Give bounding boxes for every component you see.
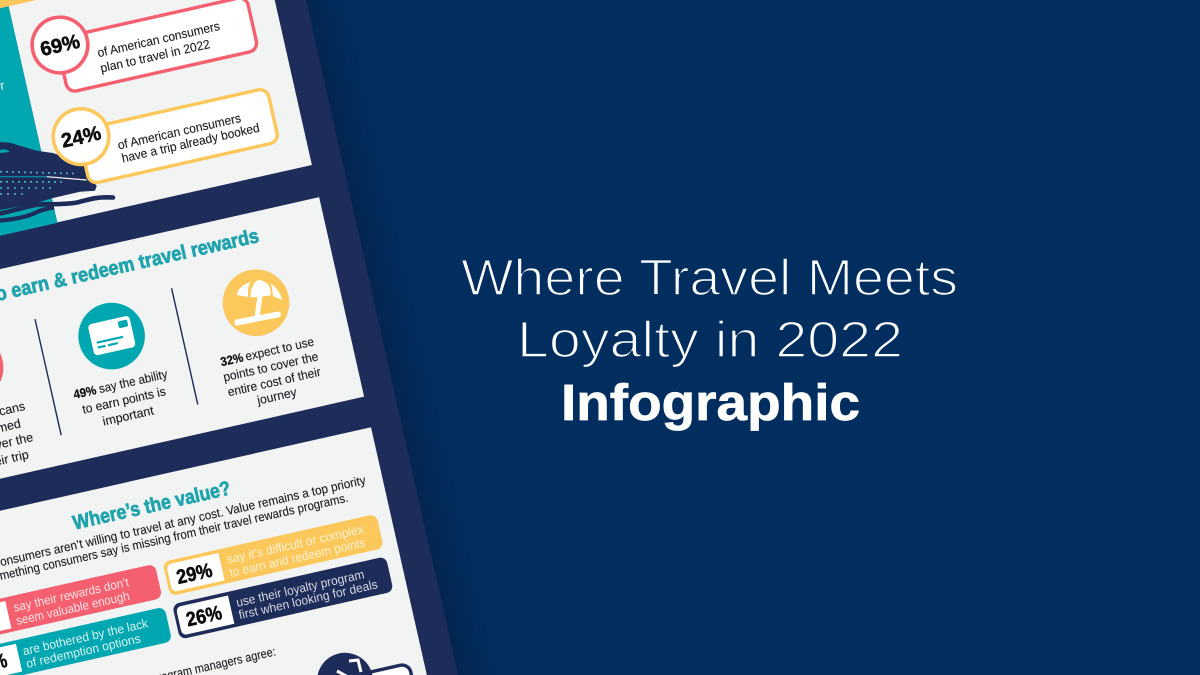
- stat pill: 26 percent: use their loyalty program: [235, 567, 366, 610]
- stat: 49 percent: 49%: [72, 383, 98, 402]
- heading: where's the value: Where’s the value?: [71, 478, 233, 534]
- stat: 49 percent: to earn points is: [81, 384, 167, 417]
- stat: 32 percent: entire cost of their: [226, 365, 322, 399]
- icon: beach umbrella: [234, 280, 282, 326]
- stat: 32 percent: 32%: [219, 350, 245, 369]
- tilted infographic sheet: [0, 0, 528, 675]
- body copy: Consumers aren’t willing to travel at any cost. Value remains a top priority: [0, 473, 368, 571]
- title line 3: Infographic: [561, 374, 860, 431]
- stat pill: 26 percent: [172, 556, 394, 640]
- callout: 24 percent: [48, 67, 279, 190]
- stat pill: 29 percent: [163, 514, 384, 596]
- stat pill: lack of redemption options: [0, 607, 172, 675]
- stat pill: 29 percent: to earn and redeem points: [228, 536, 367, 580]
- callout: 24 percent: of American consumers: [116, 111, 242, 152]
- panel: where's the value: [0, 427, 459, 675]
- icon: bottom callout with navy circle: [312, 639, 422, 675]
- callout: 69 percent: plan to travel in 2022: [99, 37, 211, 75]
- icon: credit card: [72, 296, 151, 376]
- callout: 24 percent: 24%: [59, 122, 103, 153]
- stat pill: rewards not valuable: say their rewards don’t: [12, 575, 131, 615]
- callout: 69 percent: 69%: [38, 31, 82, 61]
- stat: 32 percent: points to cover the: [222, 349, 320, 384]
- callout: 69 percent: of American consumers: [96, 19, 221, 60]
- callout: 24 percent: have a trip already booked: [120, 121, 261, 165]
- stat: covered by points: [0, 399, 38, 473]
- icon: luggage glyph: [337, 660, 361, 675]
- stat: 49 percent: say the ability: [97, 367, 169, 396]
- title line 2: Loyalty in 2022: [517, 311, 903, 368]
- stat pill: 29 percent: 29%: [175, 560, 215, 589]
- icon: pink circle: [0, 328, 10, 407]
- stat: 49 percent: important: [101, 403, 156, 429]
- stat pill: lack of redemption options: are bothered by the lack: [21, 616, 150, 658]
- illustration: cruise ship: [0, 142, 113, 220]
- stat: 49 percent: [72, 367, 177, 434]
- panel: ways to earn and redeem: [0, 197, 364, 522]
- title: [461, 249, 958, 431]
- stat: 32 percent: journey: [255, 385, 299, 408]
- stat: 32 percent: expect to use: [244, 335, 315, 364]
- title line 1: Where Travel Meets: [461, 249, 958, 306]
- callout: 69 percent: [27, 0, 258, 98]
- stat: 32 percent: [219, 334, 326, 414]
- stat pill: lack of redemption options: of redemption options: [25, 632, 142, 671]
- stat pill: 29 percent: say it’s difficult or complex: [225, 522, 366, 567]
- stat pill: rewards not valuable: [0, 564, 162, 646]
- icon: yellow circle: [216, 263, 296, 343]
- panel: travel intentions: [0, 0, 312, 290]
- stat pill: 26 percent: 26%: [184, 602, 224, 631]
- stat pill: 26 percent: first when looking for deals: [237, 577, 379, 622]
- stat pill: rewards not valuable: seem valuable enough: [15, 589, 131, 628]
